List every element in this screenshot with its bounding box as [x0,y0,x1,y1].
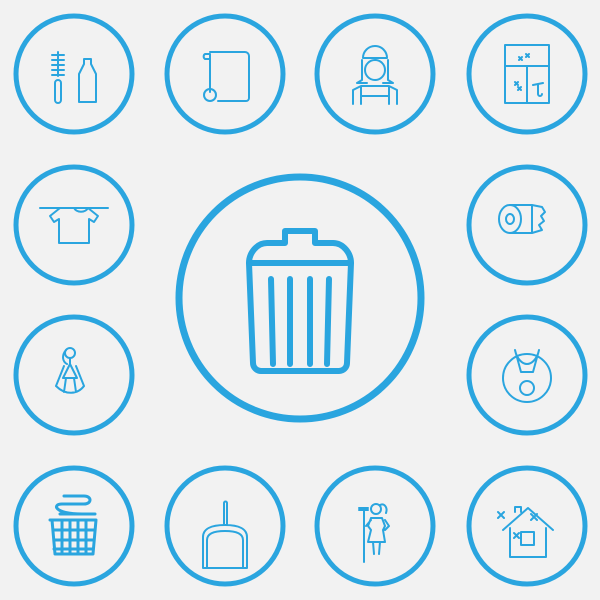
icon: clothespin [469,317,585,433]
icon: laundry basket [16,468,132,584]
icon: t-shirt on line [16,167,132,283]
icon: wheelie bin [167,16,283,132]
icon: clean house [469,468,585,584]
icon: toilet paper [469,167,585,283]
icon: maid [317,16,433,132]
icon: window cleaning [469,16,585,132]
icon: brush and bottle [16,16,132,132]
icon: trash can (center) [179,177,421,419]
icon: maid with broom [317,468,433,584]
icon: girl jumping rope [16,317,132,433]
icon: dustpan [167,468,283,584]
